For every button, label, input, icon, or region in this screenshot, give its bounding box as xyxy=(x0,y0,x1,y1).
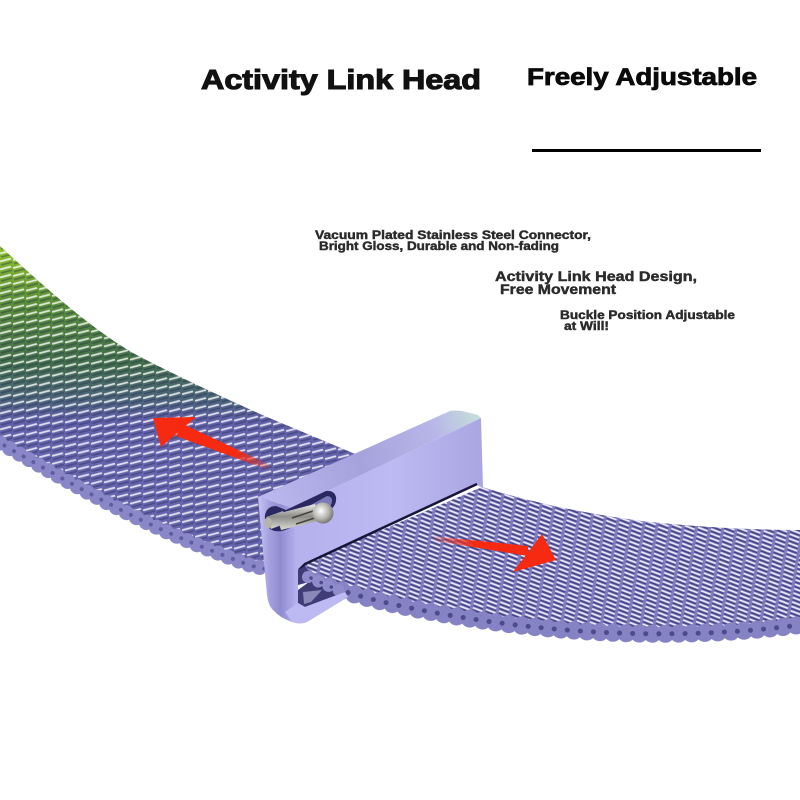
steel pin xyxy=(264,502,334,530)
right mesh band xyxy=(298,487,800,634)
feature text: stainless steel connector: Vacuum Plated Stainless Steel Connector, xyxy=(315,228,591,242)
heading underline xyxy=(532,149,761,152)
arrow: right pointing xyxy=(432,534,556,572)
feature text: stainless steel connector xyxy=(315,228,591,253)
lower connector bar xyxy=(285,592,348,624)
connector top face xyxy=(258,410,481,508)
feature text: link head design: Free Movement xyxy=(500,281,616,297)
slot shadow line xyxy=(299,484,477,570)
feature text: link head design: Activity Link Head Design, xyxy=(495,268,697,284)
pin slot light cut xyxy=(298,496,332,522)
feature text: link head design xyxy=(495,268,697,297)
feature text: buckle position xyxy=(560,308,735,333)
feature text: buckle position: Buckle Position Adjustable xyxy=(560,308,735,322)
heading: Activity Link Head: Activity Link Head xyxy=(201,64,481,95)
connector buckle xyxy=(258,410,483,624)
arrow: left pointing xyxy=(153,417,272,469)
heading: Freely Adjustable: Freely Adjustable xyxy=(527,64,757,91)
left mesh band xyxy=(0,246,360,569)
feature text: buckle position: at Will! xyxy=(564,319,609,333)
pin slot xyxy=(265,491,336,531)
lower slot interior xyxy=(298,566,348,607)
connector body xyxy=(258,418,483,624)
feature text: stainless steel connector: Bright Gloss, Durable and Non-fading xyxy=(319,239,559,253)
